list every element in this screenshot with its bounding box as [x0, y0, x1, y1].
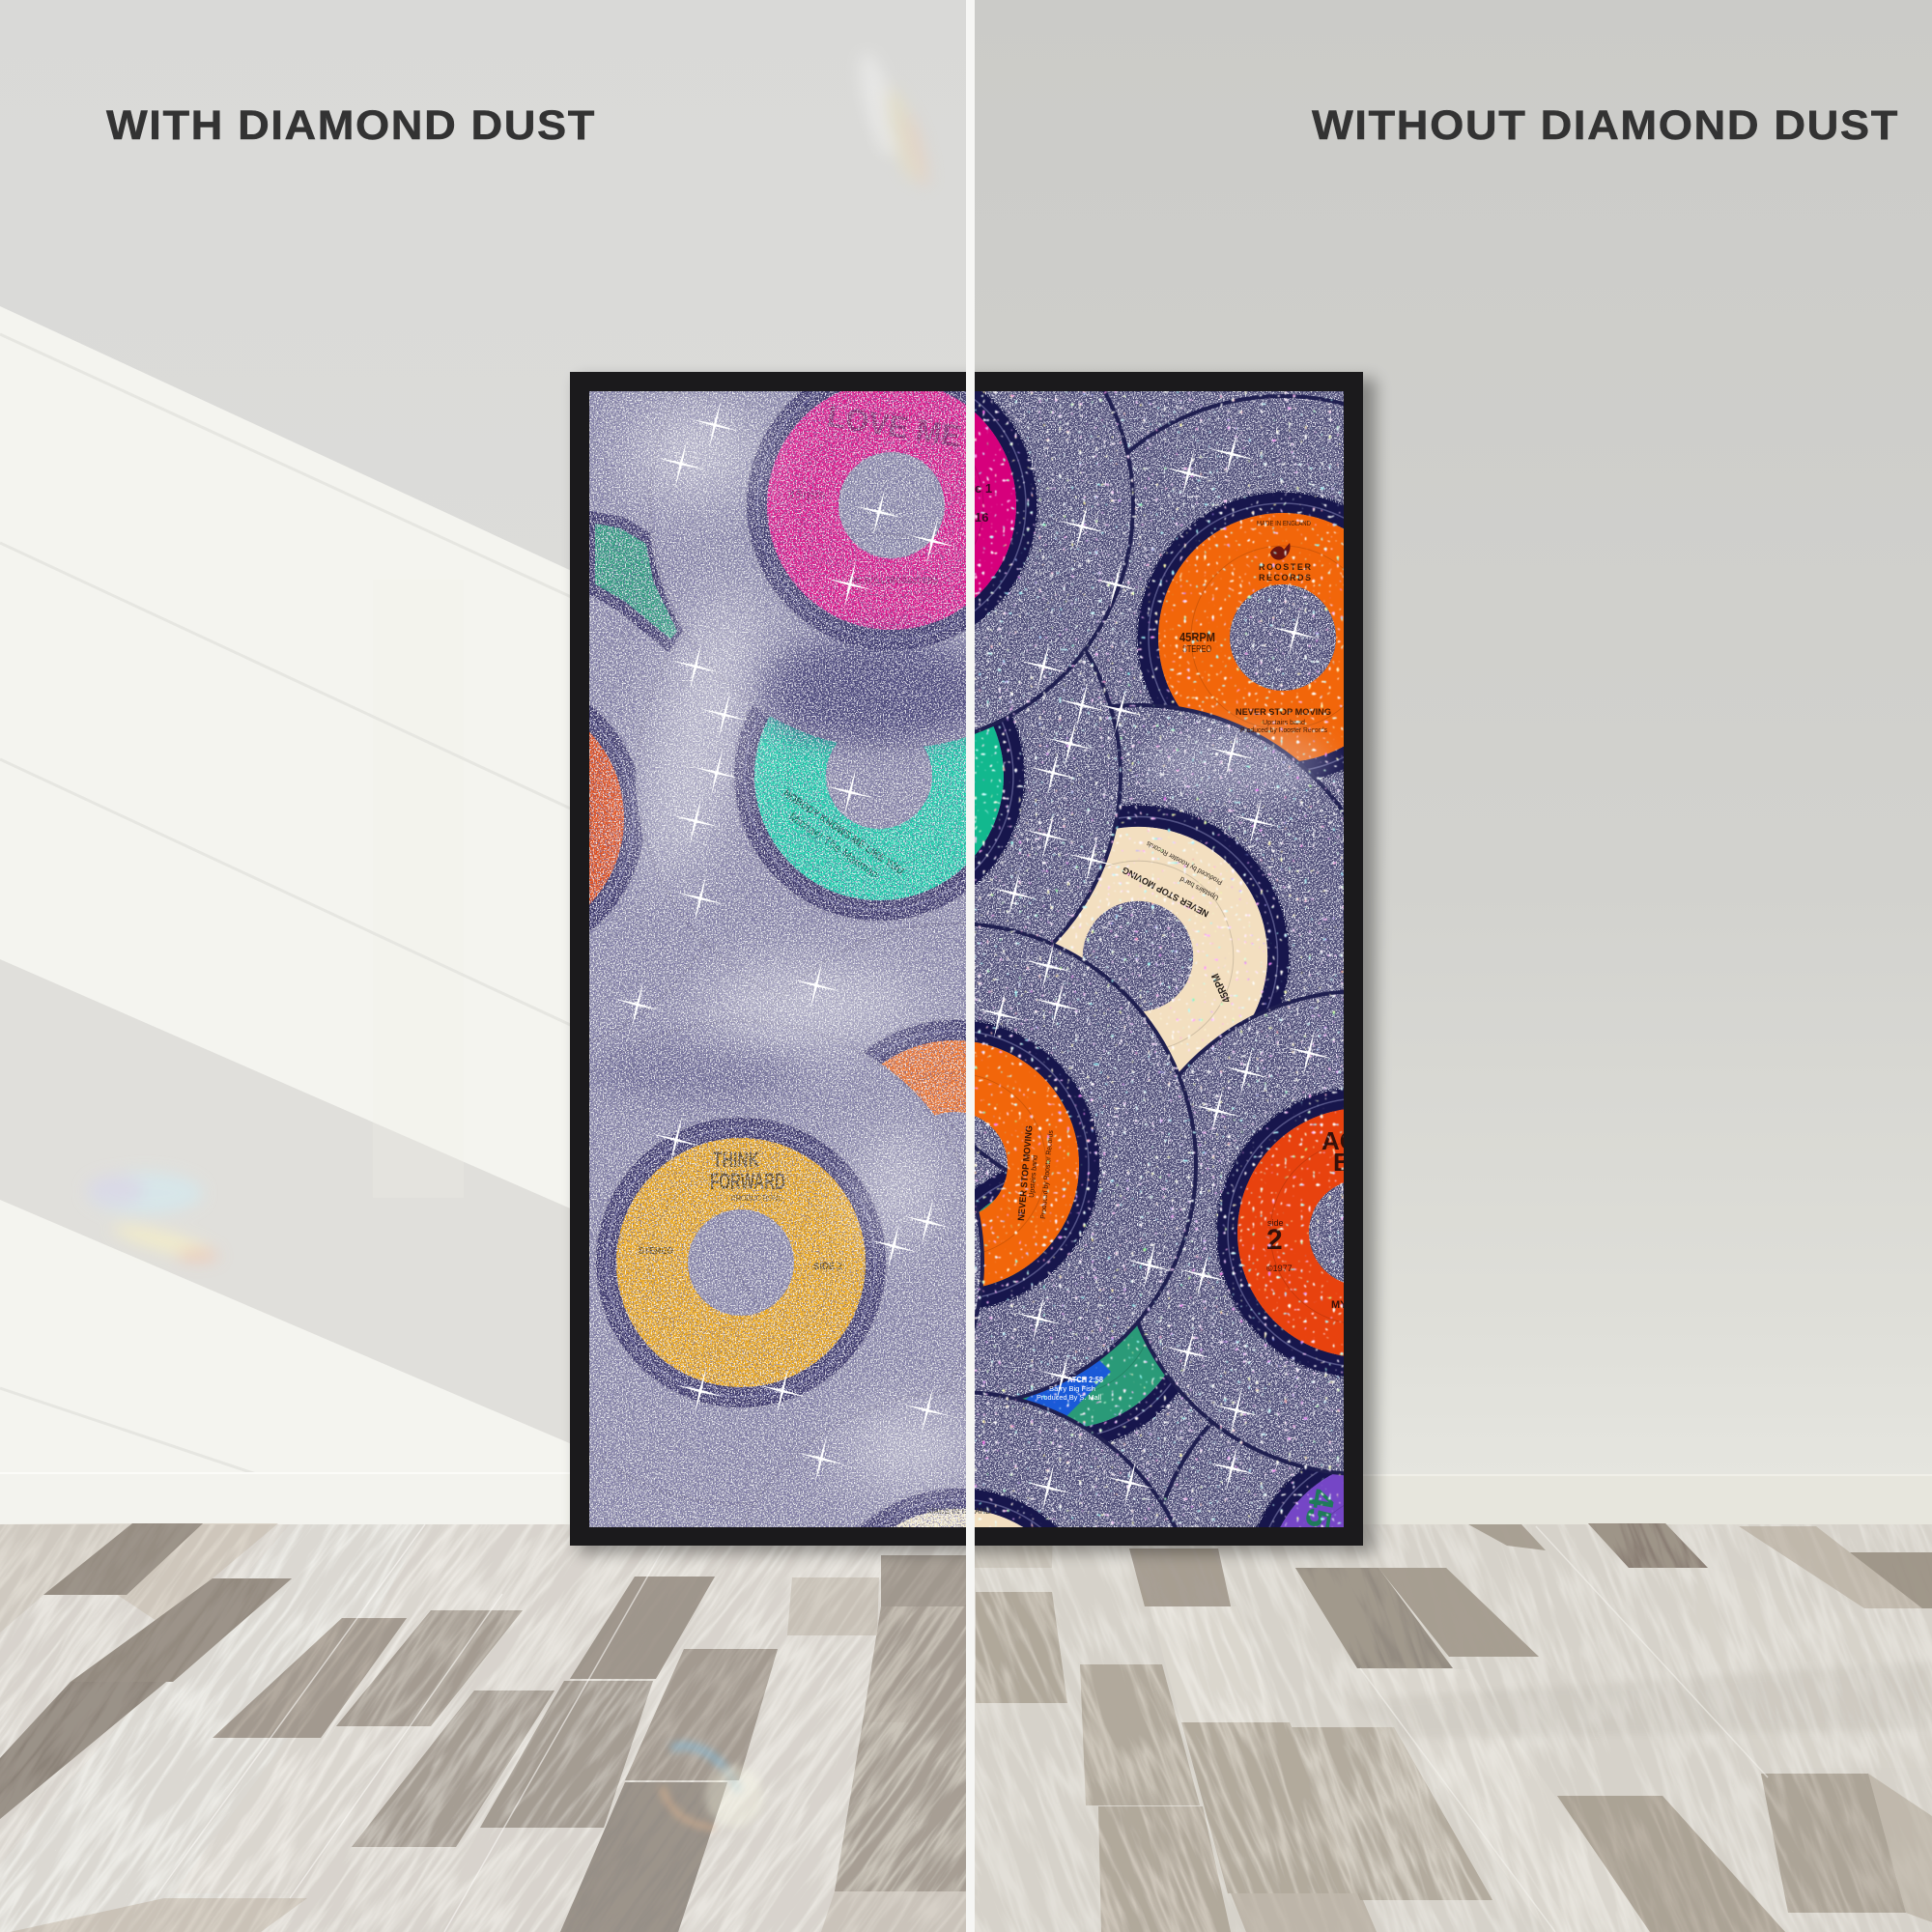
sparkles	[969, 423, 1340, 1519]
label text: rooster record: ROOSTER	[1259, 562, 1312, 572]
label text: red record: side	[1267, 1218, 1284, 1228]
frame shadow	[578, 379, 1376, 1553]
label text: lower cream record: MADE IN E	[927, 1507, 967, 1516]
label text: lower cream and purple records: AND	[975, 1507, 991, 1516]
label text: green record	[1037, 1375, 1103, 1402]
label text: yellow record: PRODUCTIONS	[731, 1194, 782, 1203]
light flare: wall rainbow	[87, 1172, 219, 1264]
highlight on cream record vinyl	[1140, 724, 1333, 802]
floor: right wood planks	[975, 1523, 1932, 1932]
label text: rooster record: STEREO	[1182, 644, 1211, 655]
label text: yellow record: THINK	[713, 1148, 759, 1172]
label text: red record: AC	[1321, 1126, 1358, 1155]
label text: pink record	[787, 398, 964, 585]
label text: cream record	[1121, 839, 1234, 1005]
label text: green record: Barry Big Fish	[1049, 1384, 1095, 1393]
shaded vinyl below pink record	[753, 638, 995, 744]
heading: with diamond dust: WITH DIAMOND DUST	[106, 102, 596, 149]
label text: rooster record: 45RPM	[1179, 630, 1215, 644]
label text: yellow record: STEREO	[639, 1246, 673, 1257]
label text: pink record side	[976, 484, 992, 522]
label text: red record: ©1977	[1266, 1264, 1293, 1273]
bokeh sparkles	[975, 391, 1344, 1527]
label text: orange record: Upstairs band	[1027, 1155, 1039, 1198]
label text: cream record: Produced by Rooster Records	[1145, 839, 1224, 887]
label text: rooster record	[1179, 519, 1331, 734]
label text: yellow record	[639, 1148, 842, 1272]
label text: pink record: 45rpm	[787, 487, 826, 502]
label text: red record: 2	[1266, 1224, 1283, 1256]
label text: yellow record: FORWARD	[710, 1169, 785, 1195]
white diamond dust specks	[589, 391, 966, 1527]
light flare: floor rainbow	[662, 1746, 763, 1828]
dark dust specks	[589, 391, 966, 1527]
label text: orange record: NEVER STOP MOVING	[1016, 1125, 1036, 1221]
label text: lower cream and purple records	[975, 1487, 1343, 1531]
light flare: upper rainbow	[852, 44, 933, 197]
label text: red record	[1266, 1126, 1358, 1311]
panel: wall with diamond dust side	[0, 0, 966, 1524]
label text: pink record: LOVE ME	[825, 398, 964, 454]
label text: teal record: Michael The Mailman	[786, 810, 881, 882]
label text: cream record: 45RPM	[1209, 972, 1234, 1005]
divider line	[966, 0, 975, 1932]
panel: wall without diamond dust side	[975, 0, 1932, 1524]
heading: without diamond dust: WITHOUT DIAMOND DUST	[1312, 102, 1899, 149]
label text: orange record	[1016, 1125, 1055, 1221]
label text: red record: B	[1333, 1148, 1351, 1177]
label text: lower cream and purple records: 45	[1297, 1487, 1343, 1531]
sparkles	[607, 394, 963, 1490]
picture frame	[570, 372, 1363, 1546]
artwork: with diamond dust half	[589, 391, 966, 1527]
label text: teal record: NOBODY KNOWS ME LIKE YOU	[781, 788, 906, 877]
glow streaks	[621, 406, 976, 1488]
label text: cream record: NEVER STOP MOVING	[1121, 864, 1210, 919]
label text: yellow record: SIDE 2	[813, 1262, 842, 1272]
label text: rooster record: RECORDS	[1259, 573, 1311, 582]
label text: pink record: THE ROLLERCOASTERS	[847, 576, 938, 585]
label text: rooster record: MADE IN ENGLAND	[1257, 519, 1311, 527]
label text: pink record side: 16	[975, 510, 988, 525]
label text: cream record: Upstairs band	[1179, 875, 1220, 902]
label text: orange record: Produced by Rooster Records	[1038, 1130, 1055, 1219]
shaded vinyl above yellow record	[589, 1043, 802, 1101]
label text: rooster record: Produced by Rooster Records	[1240, 725, 1327, 734]
floor: left wood planks	[0, 1523, 966, 1932]
label text: rooster record: NEVER STOP MOVING	[1236, 707, 1331, 718]
artwork: without diamond dust half	[975, 391, 1344, 1527]
label text: pink record side: e 1	[975, 481, 992, 496]
label text: red record: MY	[1331, 1299, 1348, 1311]
label text: green record: Produced By S. Mall	[1037, 1393, 1101, 1402]
label text: green record: ATCH 2:58	[1067, 1375, 1103, 1384]
label text: rooster record: Upstairs band	[1263, 718, 1305, 726]
